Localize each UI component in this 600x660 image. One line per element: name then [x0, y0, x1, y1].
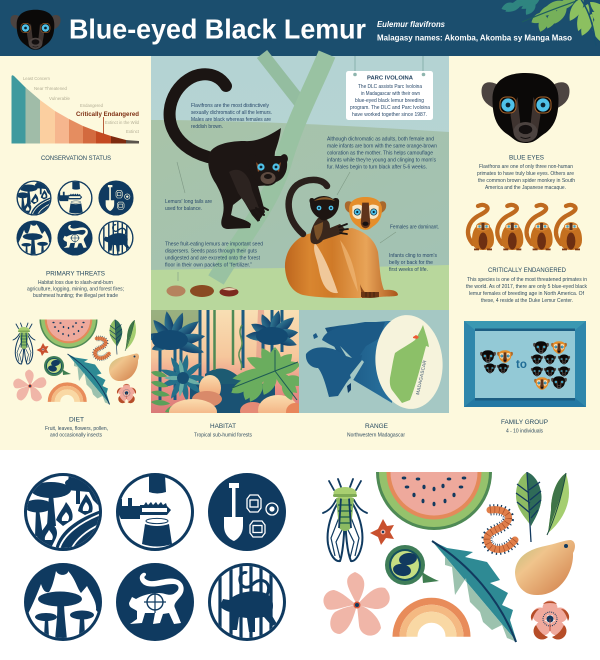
callout: Parc Ivoloina: blue-eyed black lemur breeding — [355, 98, 424, 104]
description: agriculture, logging, mining, and forest fires; — [27, 286, 124, 292]
range caption: RANGE — [365, 423, 388, 430]
description: 4 - 10 individuals — [506, 428, 543, 434]
peach boulders — [199, 375, 221, 394]
heading: DIET — [69, 416, 84, 424]
text: seed dispersal — [165, 242, 263, 268]
panel: critically endangered — [466, 205, 587, 304]
panel: central scene — [151, 54, 449, 310]
heading: CONSERVATION STATUS — [41, 155, 111, 162]
icon: hunting large — [116, 563, 194, 641]
range caption — [347, 423, 405, 438]
left fern — [151, 371, 172, 412]
text: infant coloration: infants while they're young and clinging to mom's — [327, 158, 436, 164]
heading: BLUE EYES — [509, 154, 544, 162]
icon: logging large — [116, 473, 194, 551]
callout: infants cling: belly or back for the — [389, 260, 433, 266]
female lemur with infant — [285, 180, 398, 298]
icon: four breeding females — [468, 205, 582, 250]
cone to inset — [325, 321, 395, 403]
enlarged diet illustration — [323, 472, 575, 642]
range caption: Northwestern Madagascar — [347, 432, 405, 438]
callout: females dominant — [380, 224, 439, 243]
infant tail — [289, 180, 327, 234]
callout: females dominant: Females are dominant. — [390, 224, 439, 230]
description: the common brown spider monkey in South — [478, 178, 575, 184]
callout: tails: used for balance. — [165, 206, 202, 212]
description: America and the Japanese macaque. — [485, 185, 566, 191]
faces: small group — [480, 350, 513, 373]
status labels: Endangered — [80, 103, 103, 108]
text: dichromatism: Flavifrons are the most distinctively — [191, 103, 269, 109]
enlarged threat icons — [24, 473, 286, 641]
icon: leaf fronds — [502, 0, 600, 41]
picture frame — [464, 321, 586, 407]
icon: male lemur face — [482, 73, 570, 143]
text: dichromatism: sexually dichromatic of all the lemurs. — [191, 110, 272, 116]
scientific name: Eulemur flavifrons — [377, 20, 446, 29]
status labels: Extinct in the Wild — [105, 120, 139, 125]
callout: tails: Lemurs' long tails are — [165, 199, 212, 205]
text: infant coloration: male infants are born with the same orange-brown — [327, 144, 437, 150]
description: primates to have truly blue eyes. Others are — [477, 171, 574, 177]
text: infant coloration: fur. Males begin to turn black after 5-6 weeks. — [327, 164, 427, 170]
callout: Parc Ivoloina: have worked together since 1987. — [352, 112, 427, 118]
icon: mining large — [208, 473, 286, 551]
left palm crown — [151, 311, 205, 354]
heading: PRIMARY THREATS — [46, 270, 105, 278]
description: these, 4 reside at the Duke Lemur Center. — [481, 298, 573, 304]
star plant — [160, 354, 204, 400]
habitat caption: Tropical sub-humid forests — [194, 432, 252, 438]
icon: lemur face — [10, 10, 61, 50]
panel: diet — [13, 320, 139, 438]
status labels — [23, 76, 140, 134]
status labels: Near Threatened — [34, 86, 67, 91]
faces: large group — [531, 341, 570, 390]
panel: primary threats — [16, 180, 134, 299]
description: This species is one of the most threatened primates in — [467, 277, 587, 283]
text: dichromatism: reddish brown. — [191, 124, 223, 130]
panel: habitat — [151, 310, 299, 413]
description — [466, 277, 587, 304]
habitat caption — [194, 423, 252, 438]
title: Blue-eyed Black Lemur — [69, 14, 366, 44]
status labels: Extinct — [126, 129, 140, 134]
status labels: Vulnerable — [49, 96, 70, 101]
icon: mining — [98, 180, 134, 216]
callout: Parc Ivoloina — [346, 56, 433, 120]
status labels: Least Concern — [23, 76, 50, 81]
panel: conservation status — [11, 70, 140, 162]
icon: slash-and-burn — [16, 180, 52, 216]
text: seed dispersal: undigested and are excreted onto the forest — [165, 256, 260, 262]
callout: tails — [165, 162, 212, 212]
text: infant coloration — [327, 136, 437, 170]
text: dichromatism — [191, 103, 272, 130]
infant — [310, 218, 345, 244]
callout: infants cling — [389, 253, 437, 273]
diet illustration — [13, 320, 139, 404]
madagascar inset — [375, 315, 443, 409]
panel: blue eyes — [477, 73, 575, 191]
callout: Parc Ivoloina: program. The DLC and Parc Ivoloina — [350, 105, 430, 111]
seeds — [166, 285, 238, 297]
icon: forest fires — [16, 220, 52, 256]
description: bushmeat hunting; the illegal pet trade — [33, 293, 118, 299]
description: Habitat loss due to slash-and-burn — [38, 280, 113, 286]
right palm crown — [246, 310, 298, 346]
highlighted status: Critically Endangered — [76, 111, 139, 118]
icon: bushmeat hunting — [57, 220, 93, 256]
text: infant coloration: Although dichromatic as adults, both female and — [327, 136, 434, 142]
label: to: to — [516, 359, 527, 371]
description — [477, 164, 575, 191]
big green frond — [231, 347, 299, 402]
callout: Parc Ivoloina: The DLC assists Parc Ivoloina — [358, 84, 422, 90]
branches — [216, 54, 327, 280]
icon: logging — [57, 180, 93, 216]
world map — [313, 322, 385, 354]
icon: forest fires large — [24, 563, 102, 641]
callout: infants cling: Infants cling to mom's — [389, 253, 437, 259]
description — [27, 280, 124, 299]
callout: Parc Ivoloina: in Madagascar with their own — [361, 91, 420, 97]
text: dichromatism: Males are black whereas females are — [191, 117, 271, 123]
text: seed dispersal: dispersers. Seeds pass through their guts — [165, 248, 257, 254]
callout: infants cling: first weeks of life. — [389, 267, 428, 273]
black male lemur — [170, 74, 288, 229]
description: Fruit, leaves, flowers, pollen, — [45, 426, 108, 432]
habitat caption: HABITAT — [210, 423, 236, 430]
panel: range map: MADAGASCAR — [415, 359, 427, 395]
description — [45, 426, 108, 438]
header banner — [0, 0, 600, 56]
panel: family group — [464, 321, 586, 434]
callout: Parc Ivoloina: PARC IVOLOINA — [367, 76, 413, 82]
heading: FAMILY GROUP — [501, 419, 548, 426]
text: seed dispersal: floor in their own packets of “fertilizer.” — [165, 262, 252, 268]
bar chart — [11, 70, 139, 144]
icon: pet trade large — [208, 563, 286, 641]
description: lemur females of breeding age in North America. Of — [469, 291, 584, 297]
icon: slash-and-burn large — [24, 473, 102, 551]
panel: range map — [299, 310, 449, 413]
icon: pet trade — [98, 220, 134, 256]
Malagasy names: Malagasy names: Akomba, Akomba sy Manga Maso — [377, 32, 572, 42]
description: the world. As of 2017, there are only 5 blue-eyed black — [466, 284, 587, 290]
text: infant coloration: coloration as the mother. This helps camouflage — [327, 150, 433, 156]
heading: CRITICALLY ENDANGERED — [488, 267, 566, 274]
description: Flavifrons are one of only three non-human — [479, 164, 573, 170]
text: seed dispersal: These fruit-eating lemurs are important seed — [165, 242, 263, 248]
description: and occasionally insects — [50, 432, 102, 438]
female head — [345, 197, 386, 230]
